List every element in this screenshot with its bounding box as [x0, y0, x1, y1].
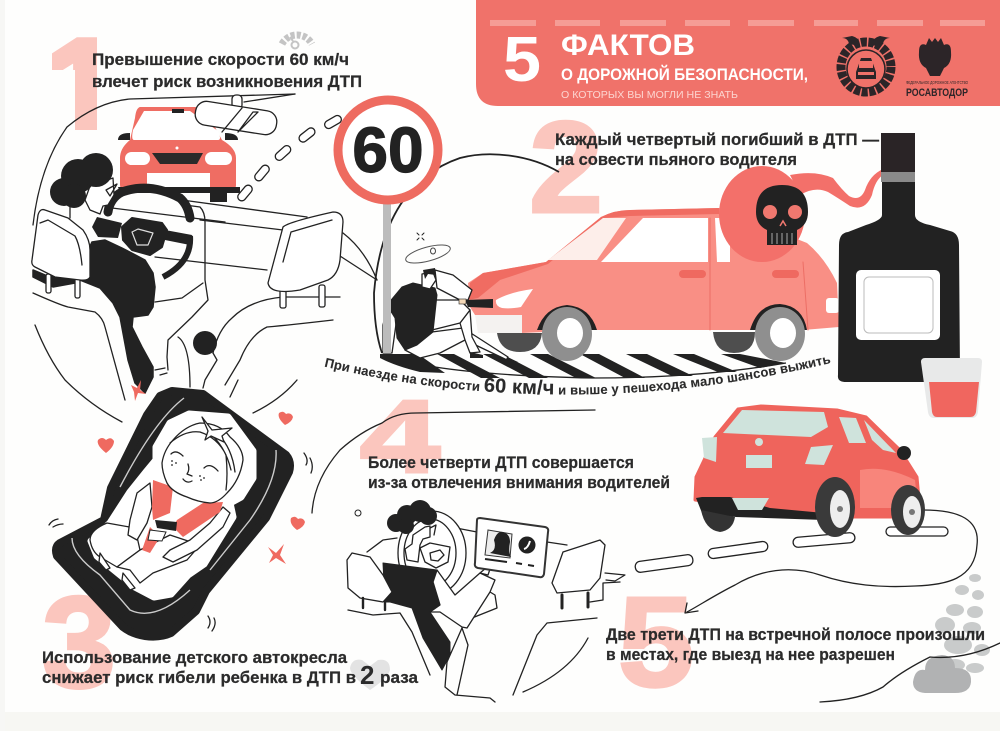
- fact 1 text: Превышение скорости 60 км/ч: [92, 50, 349, 69]
- fact 5 text: в местах, где выезд на нее разрешен: [606, 645, 895, 664]
- rear view mirror: [194, 94, 295, 136]
- header: small subtitle: О КОТОРЫХ ВЫ МОГЛИ НЕ ЗНАТЬ: [561, 89, 738, 101]
- fact 4 text: Более четверти ДТП совершается: [368, 453, 634, 472]
- driver woman: [33, 153, 155, 393]
- fact 2 text: Каждый четвертый погибший в ДТП —: [555, 130, 879, 149]
- panel: header banner: [476, 0, 1000, 106]
- left headrest: [347, 553, 392, 610]
- road dashes: [605, 527, 948, 581]
- car side: [465, 208, 839, 361]
- bottle: [838, 133, 960, 382]
- skull and poison cloud: [719, 166, 884, 262]
- woman body: [383, 563, 450, 670]
- car body: [695, 406, 920, 517]
- pedestrian man: [383, 233, 518, 362]
- speed limit sign 60: [338, 100, 438, 353]
- header: big number 5: 5: [503, 23, 541, 95]
- car front: [118, 107, 240, 202]
- fact 2 text: на совести пьяного водителя: [555, 150, 797, 169]
- number 3: 3: [42, 569, 116, 715]
- grey heart: [350, 660, 390, 690]
- number 2: 2: [529, 94, 603, 240]
- number 1: 1: [47, 14, 119, 158]
- scene arc: [374, 154, 559, 353]
- glass: [921, 358, 982, 418]
- fact 3 text: снижает риск гибели ребенка в ДТП в: [42, 668, 356, 687]
- tablet: [475, 518, 548, 577]
- fact 3 text: 2: [360, 660, 374, 690]
- fact 5 text: Две трети ДТП на встречной полосе произошли: [606, 625, 985, 644]
- illustration: pedestrian and car scene: [374, 154, 839, 378]
- speed limit sign 60: 60: [352, 114, 424, 186]
- interior outline lines: [33, 94, 377, 422]
- steering wheel: [92, 188, 192, 277]
- hearts and stars: [98, 380, 305, 564]
- fact 1 text: влечет риск возникновения ДТП: [92, 72, 362, 91]
- number 5: 5: [618, 571, 694, 714]
- fact 1 text: [92, 50, 362, 91]
- right headrest: [552, 540, 605, 608]
- fact 4 text: из-за отвлечения внимания водителей: [368, 473, 670, 492]
- illustration: child car seat: [49, 380, 312, 637]
- icon: traffic police emblem: [841, 36, 891, 92]
- baby: [90, 417, 243, 590]
- right headrest: [268, 212, 343, 308]
- fact 3 text: Использование детского автокресла: [42, 648, 348, 667]
- logo: Rosavtodor: ФЕДЕРАЛЬНОЕ ДОРОЖНОЕ АГЕНТСТВО: [906, 80, 968, 85]
- fact 2 text: [555, 130, 879, 169]
- interior lines: [312, 410, 620, 702]
- seat shell: [56, 391, 290, 637]
- header: subtitle: О ДОРОЖНОЙ БЕЗОПАСНОСТИ,: [561, 65, 808, 84]
- logo: Rosavtodor: [906, 80, 968, 99]
- fact 5 text: [606, 625, 985, 664]
- gear knob: [193, 331, 217, 355]
- logo: Rosavtodor: РОСАВТОДОР: [906, 87, 968, 99]
- road dashes: [236, 114, 343, 202]
- fact 3 text: раза: [380, 668, 419, 687]
- illustration: car rear and road: [605, 406, 977, 613]
- icon: eagle emblem: [919, 38, 951, 76]
- curved caption: При наезде на скорости 60 км/ч и выше у пешехода мало шансов выжить: [324, 357, 830, 396]
- header: title: ФАКТОВ: [561, 29, 695, 62]
- icon: grey gauge: [282, 35, 312, 48]
- steering wheel: [398, 511, 466, 595]
- fact 4 text: [368, 453, 670, 492]
- number 4: 4: [360, 379, 440, 494]
- illustration: driver and speed scene: [32, 94, 377, 422]
- crosswalk: [380, 354, 786, 378]
- route arrow: [685, 510, 977, 613]
- left headrest: [32, 210, 90, 298]
- fact 3 text: [42, 648, 419, 690]
- motion lines: [49, 453, 312, 631]
- decorative plant and cloud: [820, 574, 1000, 702]
- illustration: distracted driver: [312, 410, 620, 702]
